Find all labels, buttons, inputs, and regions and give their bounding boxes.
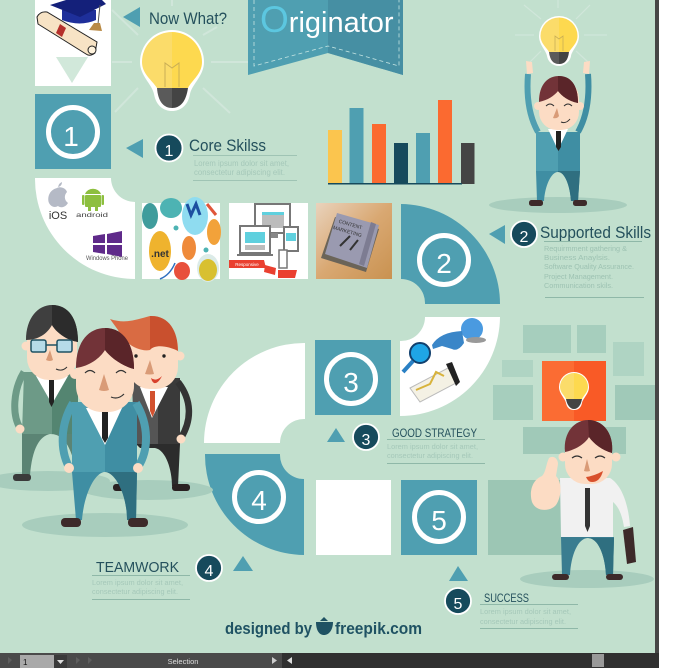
figure: man in black suit with red hair	[83, 316, 213, 500]
callout: success: 5	[454, 596, 463, 613]
callout: teamwork: consectetur adipiscing elit.	[92, 587, 178, 596]
credit: designed by freepik: designed by	[225, 619, 312, 638]
panel: mobile platforms quarter	[35, 178, 135, 279]
panel: step 1 square	[35, 94, 111, 169]
callout: success: Lorem ipsum dolor sit amet,	[480, 607, 571, 616]
image: .NET technologies collage	[142, 197, 221, 282]
banner: Originator title	[248, 0, 403, 75]
callout: now what	[123, 7, 227, 28]
figure: man in green suit with glasses	[0, 305, 110, 491]
icon: small bulb	[515, 0, 607, 66]
figure: man giving thumbs up with briefcase	[520, 420, 654, 588]
icon: diploma scroll	[37, 12, 97, 55]
callout: core skills: Lorem ipsum dolor sit amet,	[194, 159, 289, 168]
credit: designed by freepik	[225, 617, 422, 638]
callout: teamwork	[92, 555, 253, 600]
panel: step 2 quarter: 2	[436, 248, 452, 279]
credit: designed by freepik: freepik.com	[335, 619, 422, 638]
panel: white square	[316, 480, 391, 555]
callout: supported skills: Requirmment gathering &	[544, 244, 627, 253]
label: iOS: iOS	[49, 210, 67, 222]
callout: teamwork: Lorem ipsum dolor sit amet,	[92, 578, 183, 587]
callout: supported skills: Business Anaylsis.	[544, 253, 610, 262]
image: content marketing notebook: MARKETING	[332, 225, 362, 239]
label: android: android	[76, 212, 109, 219]
panel: strategy quarter with magnifier icons	[400, 317, 500, 416]
icon: down triangle	[56, 57, 88, 83]
callout: core skills: consectetur adipiscing elit.	[194, 168, 285, 177]
callout: core skills: Core Skilss	[189, 136, 266, 155]
callout: supported skills	[489, 221, 651, 298]
callout: success: SUCCESS	[484, 591, 529, 605]
toolbar: bottom status bar: 1	[23, 658, 28, 667]
callout: core skills	[126, 134, 297, 181]
panel: step 3 square: 3	[343, 367, 359, 398]
callout: success: consectetur adipiscing elit.	[480, 617, 566, 626]
icon: freepik bird	[316, 617, 333, 635]
icon: orange tile with bulb	[542, 361, 606, 421]
callout: teamwork: TEAMWORK	[96, 559, 179, 576]
icon: apple	[48, 182, 68, 207]
panel: white quarter above step 4	[204, 343, 305, 443]
callout: good strategy	[327, 424, 485, 464]
figure: man with raised arms and bulb	[489, 0, 627, 213]
image: responsive devices	[229, 203, 308, 279]
toolbar: bottom status bar: Selection	[168, 657, 198, 666]
panel: step 4 quarter: 4	[251, 485, 267, 516]
callout: good strategy: 3	[362, 432, 371, 449]
panel: top white box with graduation icon	[35, 0, 111, 86]
panel: step 1 square: 1	[63, 121, 79, 152]
callout: supported skills: Project Management.	[544, 272, 613, 281]
figure: central man in teal suit	[22, 328, 188, 537]
icon: android	[82, 189, 104, 211]
callout: now what: Now What?	[149, 9, 227, 28]
label: windows phone: Windows Phone	[86, 255, 128, 262]
panel: step 5 square	[401, 480, 477, 555]
callout: core skills: 1	[165, 143, 174, 160]
callout: teamwork: 4	[205, 563, 214, 580]
image: .NET technologies collage: .net	[151, 249, 170, 260]
toolbar: bottom status bar	[0, 653, 659, 668]
callout: supported skills: Supported Skills	[540, 223, 651, 242]
image: content marketing notebook: CONTENT	[338, 219, 363, 231]
panel: step 3 square	[315, 340, 391, 415]
icon: briefcase	[623, 527, 636, 564]
title: Originator	[260, 0, 394, 40]
callout: good strategy: Lorem ipsum dolor sit amet,	[387, 442, 478, 451]
bar chart	[328, 100, 474, 184]
icon: magnifier	[403, 343, 430, 372]
background decorative tiles	[488, 325, 655, 555]
icon: large light bulb	[112, 0, 248, 113]
callout: success	[445, 566, 578, 629]
icon: windows	[93, 231, 122, 257]
icon: figure looking	[432, 318, 486, 350]
callout: supported skills: Communication skils.	[544, 281, 613, 290]
icon: chart map	[410, 362, 460, 402]
callout: supported skills: 2	[520, 229, 529, 246]
callout: good strategy: GOOD STRATEGY	[392, 428, 477, 440]
callout: good strategy: consectetur adipiscing elit.	[387, 451, 473, 460]
panel: step 5 square: 5	[431, 505, 447, 536]
panel: step 2 quarter	[401, 204, 500, 304]
panel: step 4 quarter	[205, 454, 304, 555]
callout: supported skills: Software Quality Assurance.	[544, 262, 634, 271]
image: content marketing notebook	[316, 203, 392, 279]
label: banner text: Responsive	[235, 262, 259, 267]
icon: graduation cap	[50, 0, 106, 31]
